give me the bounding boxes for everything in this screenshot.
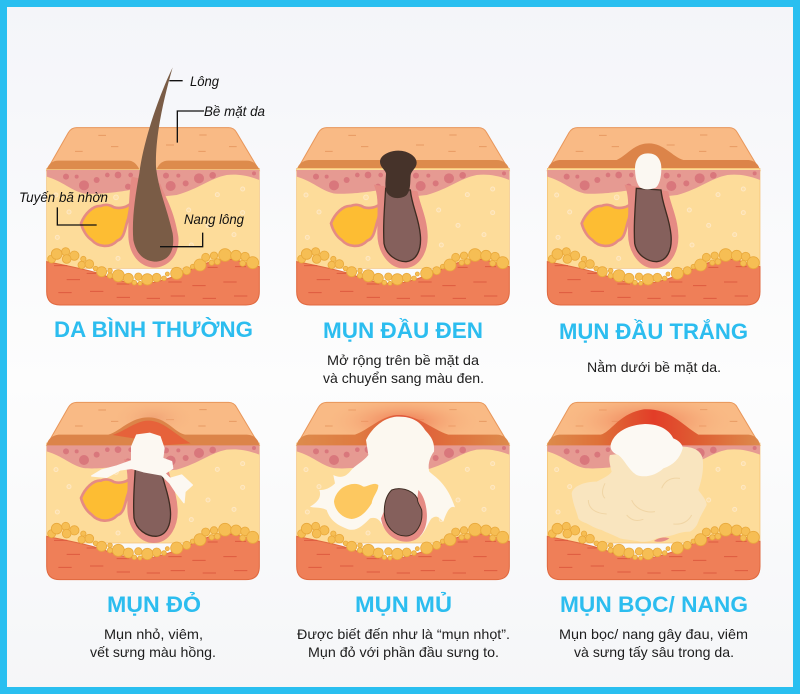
panel: pustule xyxy=(297,395,509,580)
panel: blackhead xyxy=(297,128,509,305)
heading: cyst: MỤN BỌC/ NANG xyxy=(560,592,748,617)
panel: normal skin: Bề mặt da xyxy=(204,103,265,119)
panel: whitehead xyxy=(547,128,760,305)
text: cyst description: Mụn bọc/ nang gây đau, viêm xyxy=(559,626,748,642)
heading: da binh thuong: DA BÌNH THƯỜNG xyxy=(54,317,253,342)
text: whitehead description: Nằm dưới bề mặt da. xyxy=(587,359,721,375)
text: pustule description: Được biết đến như là “mụn nhọt”. xyxy=(297,626,510,642)
heading: pustule: MỤN MỦ xyxy=(355,592,452,617)
text: blackhead description: và chuyển sang màu đen. xyxy=(323,370,484,386)
text: pustule description xyxy=(297,626,510,660)
text: papule description: Mụn nhỏ, viêm, xyxy=(104,626,203,642)
panel: normal skin: Lông xyxy=(190,73,219,89)
text: papule description xyxy=(90,626,216,660)
text: blackhead description: Mở rộng trên bề mặt da xyxy=(327,352,479,368)
text: cyst description: và sưng tấy sâu trong da. xyxy=(574,644,734,660)
panel: normal skin: Nang lông xyxy=(184,211,244,227)
panel: papule xyxy=(47,398,259,580)
panel: cyst xyxy=(547,391,760,580)
panel: normal skin xyxy=(19,67,265,305)
text: pustule description: Mụn đỏ với phần đầu sưng to. xyxy=(308,644,499,660)
text: cyst description xyxy=(559,626,748,660)
heading: papule: MỤN ĐỎ xyxy=(107,592,201,617)
heading: whitehead: MỤN ĐẦU TRẮNG xyxy=(559,319,748,344)
panel: normal skin: Tuyến bã nhờn xyxy=(19,189,108,205)
heading: blackhead: MỤN ĐẦU ĐEN xyxy=(323,318,483,343)
text: papule description: vết sưng màu hồng. xyxy=(90,644,216,660)
text: blackhead description xyxy=(323,352,484,386)
